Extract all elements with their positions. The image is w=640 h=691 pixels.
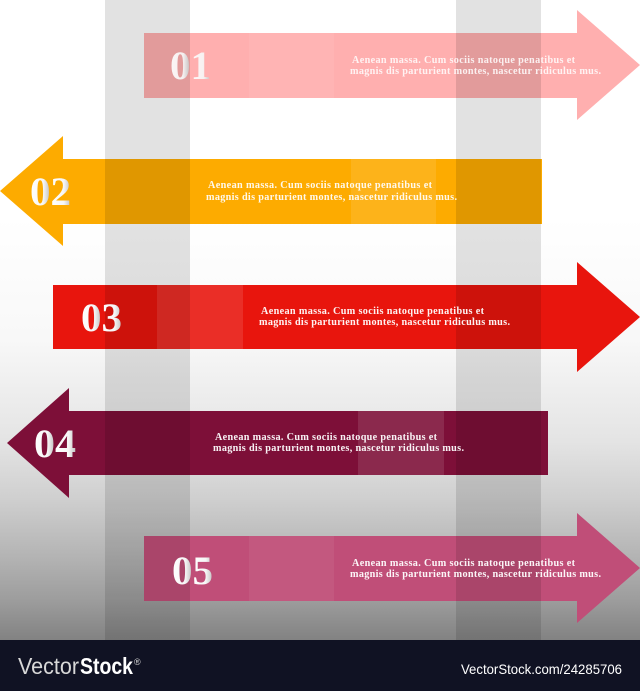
text block 2: magnis dis parturient montes, nascetur ridiculus mus. xyxy=(206,192,457,203)
number 01: 01 xyxy=(170,43,211,88)
text block 4 xyxy=(213,432,464,454)
footer logo xyxy=(18,653,141,679)
text block 4: Aenean massa. Cum sociis natoque penatibus et xyxy=(215,432,438,443)
text block 5: magnis dis parturient montes, nascetur ridiculus mus. xyxy=(350,569,601,580)
text block 3 xyxy=(259,306,510,328)
footer bar xyxy=(0,640,640,691)
text block 1: Aenean massa. Cum sociis natoque penatibus et xyxy=(352,55,576,66)
arrow 4: maroon xyxy=(7,388,548,498)
arrow 1: pink xyxy=(144,10,640,120)
footer logo: ® xyxy=(134,657,141,667)
vertical band left xyxy=(105,0,190,640)
footer logo: Stock xyxy=(80,653,133,679)
number 02: 02 xyxy=(30,169,71,214)
text block 1 xyxy=(350,55,601,77)
vertical band right xyxy=(456,0,541,640)
text block 1: magnis dis parturient montes, nascetur ridiculus mus. xyxy=(350,66,601,77)
number 03: 03 xyxy=(81,295,122,340)
text block 3: Aenean massa. Cum sociis natoque penatibus et xyxy=(261,306,485,317)
arrow 3: red xyxy=(53,262,640,372)
number 05: 05 xyxy=(172,548,213,593)
text block 2 xyxy=(206,180,457,203)
footer logo: Vector xyxy=(18,653,79,679)
text block 3: magnis dis parturient montes, nascetur ridiculus mus. xyxy=(259,317,510,328)
arrow 5: rose xyxy=(144,513,640,623)
text block 5: Aenean massa. Cum sociis natoque penatibus et xyxy=(352,558,576,569)
text block 2: Aenean massa. Cum sociis natoque penatibus et xyxy=(208,180,433,191)
text block 4: magnis dis parturient montes, nascetur ridiculus mus. xyxy=(213,443,464,454)
footer url: VectorStock.com/24285706 xyxy=(461,661,622,677)
text block 5 xyxy=(350,558,601,580)
arrow 2: orange xyxy=(0,136,542,246)
number 04: 04 xyxy=(34,421,76,466)
